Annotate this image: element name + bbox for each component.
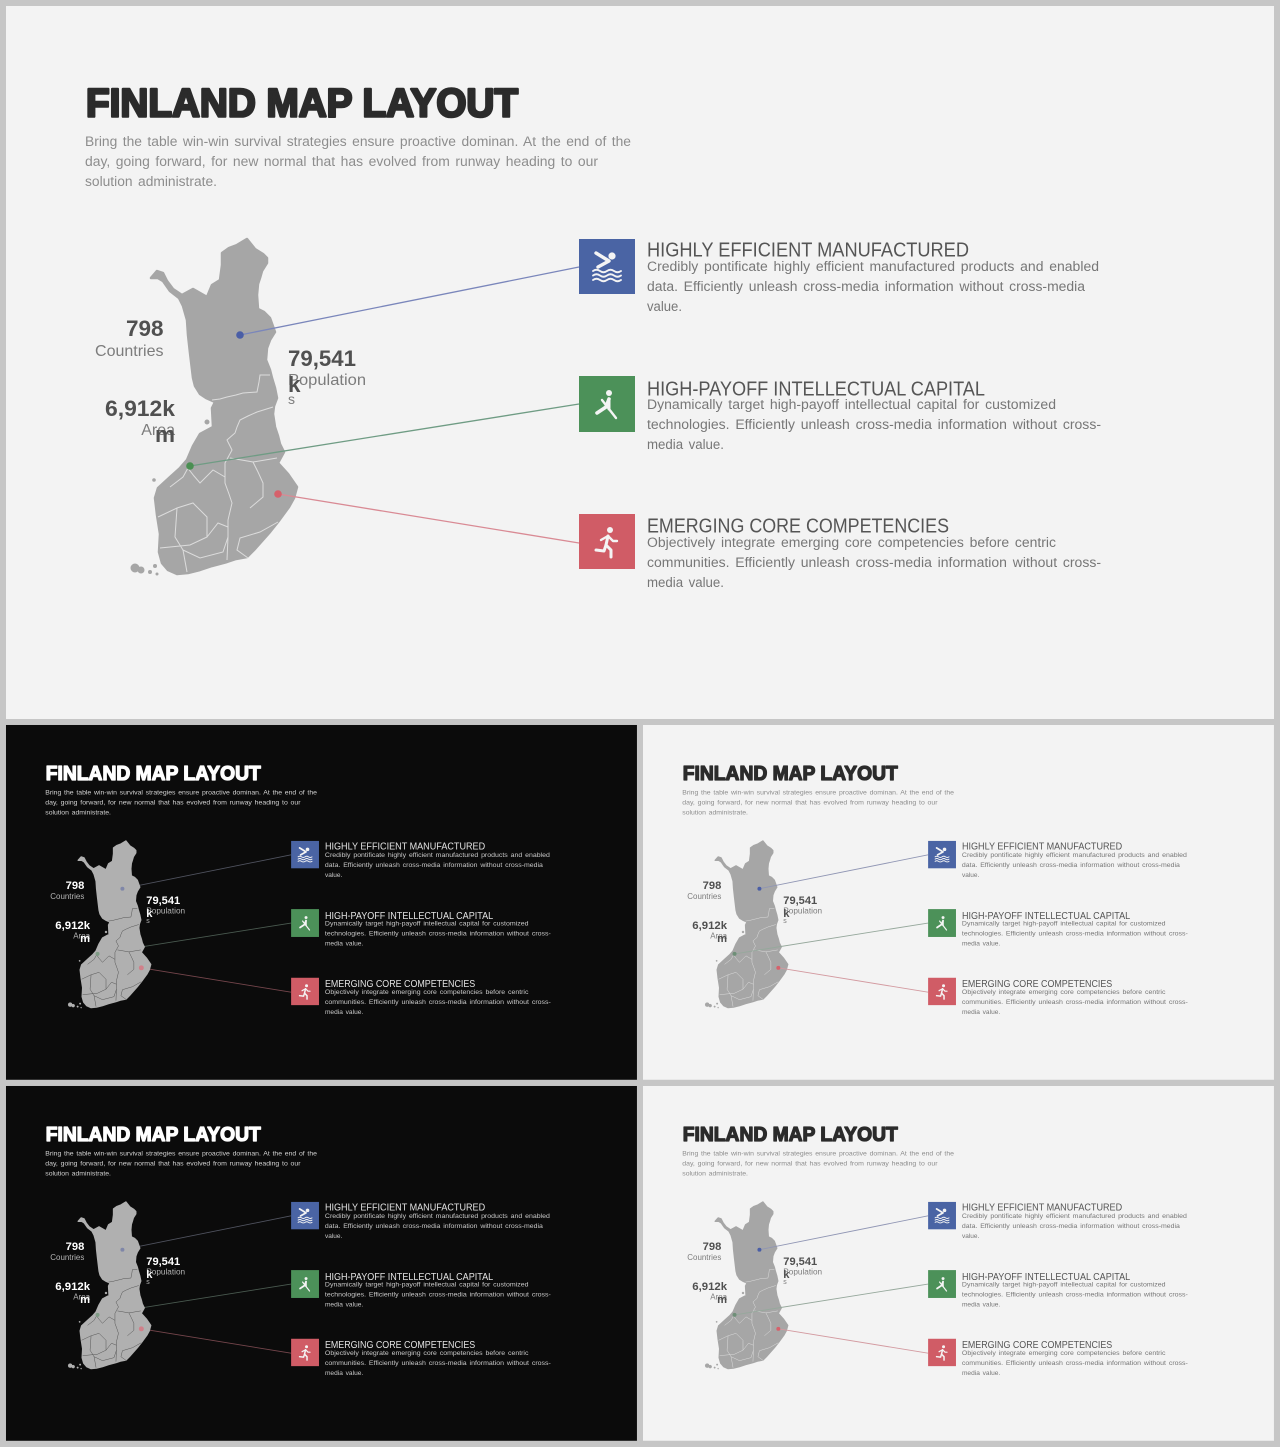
stat: population: k: [146, 908, 153, 920]
item: high-payoff: HIGH-PAYOFF INTELLECTUAL CAPITAL: [325, 1272, 494, 1283]
item: emerging core: communities. Efficiently unleash cross-media information without cross-: [325, 999, 551, 1006]
stat: population: s: [783, 1279, 787, 1286]
item: highly efficient: value.: [962, 872, 979, 879]
stat: area: Area: [710, 1292, 728, 1301]
title: FINLAND MAP LAYOUT: [683, 763, 898, 785]
stat: area: 6,912k: [55, 920, 91, 932]
item: emerging core: Objectively integrate emerging core competencies before centric: [325, 989, 529, 996]
item: high-payoff: [291, 909, 551, 947]
item: high-payoff: Dynamically target high-payoff intellectual capital for customized: [647, 397, 1056, 412]
stat: area: [55, 920, 91, 945]
item: high-payoff: technologies. Efficiently unleash cross-media information without cross-: [962, 930, 1188, 937]
stat: population: 79,541: [146, 895, 180, 907]
stat: population: k: [783, 908, 790, 920]
stat: area: 6,912k: [105, 396, 175, 421]
intro text: day, going forward, for new normal that has evolved from runway heading to our: [682, 800, 938, 807]
intro text: day, going forward, for new normal that has evolved from runway heading to our: [682, 1161, 938, 1168]
intro text: Bring the table win-win survival strategies ensure proactive dominan. At the end of the: [45, 1151, 317, 1158]
item: high-payoff: [291, 1270, 551, 1308]
stat: population: Population: [146, 907, 185, 916]
item: highly efficient: [928, 841, 1187, 879]
item: emerging core: Objectively integrate emerging core competencies before centric: [325, 1350, 529, 1357]
stat: area: [692, 920, 728, 945]
stat: countries: [687, 880, 721, 901]
map of Finland: [68, 1202, 151, 1369]
intro text: [682, 1151, 954, 1178]
connector: red: [274, 490, 579, 543]
intro text: [45, 1151, 317, 1178]
stat: countries: Countries: [687, 892, 721, 901]
stat: area: 6,912k: [55, 1281, 91, 1293]
stat: area: m: [717, 933, 727, 945]
item: high-payoff: [928, 909, 1188, 947]
intro text: solution administrate.: [85, 174, 217, 189]
item: highly efficient: Credibly pontificate highly efficient manufactured products and enabled: [962, 1213, 1187, 1220]
item: emerging core: media value.: [325, 1370, 363, 1377]
item: highly efficient: value.: [647, 299, 682, 314]
intro text: [85, 134, 631, 189]
stat: population: [783, 1256, 822, 1286]
item: highly efficient: HIGHLY EFFICIENT MANUFACTURED: [962, 842, 1122, 853]
stat: countries: Countries: [95, 343, 164, 360]
stat: population: s: [783, 918, 787, 925]
item: emerging core: [291, 1339, 551, 1377]
item: highly efficient: [579, 239, 1099, 314]
item: emerging core: communities. Efficiently unleash cross-media information without cross-: [647, 555, 1101, 570]
intro text: solution administrate.: [45, 1171, 111, 1178]
item: highly efficient: data. Efficiently unleash cross-media information without cross-media: [962, 862, 1180, 869]
item: high-payoff: media value.: [962, 940, 1000, 947]
stat: countries: 798: [66, 880, 84, 892]
item: emerging core: EMERGING CORE COMPETENCIES: [325, 1340, 476, 1351]
panel: light slide top right: [643, 725, 1274, 1080]
item: high-payoff: technologies. Efficiently unleash cross-media information without cross-: [325, 930, 551, 937]
item: highly efficient: [291, 841, 550, 879]
stat: countries: Countries: [687, 1253, 721, 1262]
item: high-payoff: technologies. Efficiently unleash cross-media information without cross-: [325, 1291, 551, 1298]
stat: population: k: [146, 1269, 153, 1281]
intro text: [45, 790, 317, 817]
stat: population: [146, 1256, 185, 1286]
item: emerging core: media value.: [962, 1009, 1000, 1016]
item: highly efficient: HIGHLY EFFICIENT MANUFACTURED: [962, 1203, 1122, 1214]
stat: area: [692, 1281, 728, 1306]
item: highly efficient: value.: [325, 1233, 342, 1240]
item: high-payoff: Dynamically target high-payoff intellectual capital for customized: [962, 921, 1166, 928]
stat: population: k: [288, 372, 301, 397]
stat: population: [146, 895, 185, 925]
item: highly efficient: HIGHLY EFFICIENT MANUFACTURED: [325, 1203, 485, 1214]
stat: area: m: [80, 933, 90, 945]
title: FINLAND MAP LAYOUT: [46, 763, 261, 785]
stat: population: 79,541: [288, 346, 356, 371]
title: FINLAND MAP LAYOUT: [86, 82, 518, 126]
connector: blue: [236, 267, 579, 339]
stat: population: Population: [783, 1268, 822, 1277]
stat: area: Area: [710, 931, 728, 940]
item: highly efficient: value.: [962, 1233, 979, 1240]
item: highly efficient: data. Efficiently unleash cross-media information without cross-media: [647, 279, 1085, 294]
stat: population: s: [146, 1279, 150, 1286]
item: high-payoff: [928, 1270, 1188, 1308]
item: emerging core: [291, 978, 551, 1016]
connector: green: [186, 404, 579, 470]
stat: population: Population: [146, 1268, 185, 1277]
item: emerging core: media value.: [325, 1009, 363, 1016]
intro text: Bring the table win-win survival strategies ensure proactive dominan. At the end of the: [682, 1151, 954, 1158]
item: emerging core: EMERGING CORE COMPETENCIES: [962, 979, 1113, 990]
stat: population: [783, 895, 822, 925]
connectors: [98, 1216, 291, 1353]
stat: area: 6,912k: [692, 920, 728, 932]
intro text: Bring the table win-win survival strategies ensure proactive dominan. At the end of the: [45, 790, 317, 797]
item: high-payoff: Dynamically target high-payoff intellectual capital for customized: [325, 1282, 529, 1289]
item: emerging core: media value.: [962, 1370, 1000, 1377]
item: emerging core: communities. Efficiently unleash cross-media information without cross-: [962, 1360, 1188, 1367]
stat: countries: 798: [703, 1241, 721, 1253]
item: emerging core: [579, 514, 1101, 590]
item: highly efficient: Credibly pontificate highly efficient manufactured products and enabled: [325, 852, 550, 859]
item: high-payoff: media value.: [325, 1301, 363, 1308]
item: highly efficient: data. Efficiently unleash cross-media information without cross-media: [962, 1223, 1180, 1230]
item: emerging core: EMERGING CORE COMPETENCIES: [325, 979, 476, 990]
intro text: solution administrate.: [45, 810, 111, 817]
stat: population: k: [783, 1269, 790, 1281]
item: highly efficient: [291, 1202, 550, 1240]
item: emerging core: EMERGING CORE COMPETENCIES: [962, 1340, 1113, 1351]
item: emerging core: EMERGING CORE COMPETENCIES: [647, 516, 949, 538]
panel: light slide bottom right: [643, 1086, 1274, 1441]
intro text: solution administrate.: [682, 810, 748, 817]
item: highly efficient: Credibly pontificate highly efficient manufactured products and enabled: [962, 852, 1187, 859]
item: highly efficient: HIGHLY EFFICIENT MANUFACTURED: [647, 240, 969, 262]
panel: dark slide top left: [6, 725, 637, 1080]
item: emerging core: [928, 1339, 1188, 1377]
intro text: Bring the table win-win survival strategies ensure proactive dominan. At the end of the: [682, 790, 954, 797]
connectors: [733, 855, 928, 992]
connectors: [98, 855, 291, 992]
stat: population: 79,541: [783, 1256, 817, 1268]
map of Finland: [705, 1202, 788, 1369]
stat: countries: 798: [66, 1241, 84, 1253]
stat: area: 6,912k: [692, 1281, 728, 1293]
item: highly efficient: Credibly pontificate highly efficient manufactured products and enabled: [325, 1213, 550, 1220]
stat: population: s: [146, 918, 150, 925]
panel: dark slide bottom left: [6, 1086, 637, 1441]
stat: area: m: [155, 422, 175, 447]
intro text: [682, 790, 954, 817]
stat: countries: 798: [703, 880, 721, 892]
item: highly efficient: Credibly pontificate highly efficient manufactured products and enabled: [647, 259, 1099, 274]
item: high-payoff: technologies. Efficiently unleash cross-media information without cross-: [647, 417, 1101, 432]
item: high-payoff: Dynamically target high-payoff intellectual capital for customized: [962, 1282, 1166, 1289]
stat: population: Population: [288, 372, 366, 389]
intro text: day, going forward, for new normal that has evolved from runway heading to our: [85, 154, 599, 169]
title: FINLAND MAP LAYOUT: [683, 1124, 898, 1146]
item: highly efficient: value.: [325, 872, 342, 879]
stat: area: Area: [73, 1292, 91, 1301]
intro text: day, going forward, for new normal that has evolved from runway heading to our: [45, 800, 301, 807]
stat: countries: Countries: [50, 1253, 84, 1262]
stat: population: [288, 346, 366, 407]
stat: countries: [95, 316, 164, 360]
item: emerging core: communities. Efficiently unleash cross-media information without cross-: [325, 1360, 551, 1367]
intro text: Bring the table win-win survival strategies ensure proactive dominan. At the end of the: [85, 134, 631, 149]
item: high-payoff: [579, 376, 1101, 452]
stat: area: Area: [141, 422, 175, 439]
stat: area: [55, 1281, 91, 1306]
stat: countries: 798: [126, 316, 164, 341]
intro text: solution administrate.: [682, 1171, 748, 1178]
item: high-payoff: technologies. Efficiently unleash cross-media information without cross-: [962, 1291, 1188, 1298]
stat: countries: [687, 1241, 721, 1262]
item: emerging core: Objectively integrate emerging core competencies before centric: [962, 1350, 1166, 1357]
item: highly efficient: data. Efficiently unleash cross-media information without cross-media: [325, 862, 543, 869]
connectors: [733, 1216, 928, 1353]
stat: population: 79,541: [146, 1256, 180, 1268]
item: high-payoff: HIGH-PAYOFF INTELLECTUAL CAPITAL: [962, 911, 1131, 922]
stat: area: Area: [73, 931, 91, 940]
stat: population: 79,541: [783, 895, 817, 907]
item: emerging core: Objectively integrate emerging core competencies before centric: [647, 535, 1056, 550]
map of Finland: [705, 841, 788, 1008]
stat: countries: [50, 880, 84, 901]
item: emerging core: Objectively integrate emerging core competencies before centric: [962, 989, 1166, 996]
item: high-payoff: Dynamically target high-payoff intellectual capital for customized: [325, 921, 529, 928]
stat: countries: Countries: [50, 892, 84, 901]
item: highly efficient: [928, 1202, 1187, 1240]
item: highly efficient: data. Efficiently unleash cross-media information without cross-media: [325, 1223, 543, 1230]
title: FINLAND MAP LAYOUT: [46, 1124, 261, 1146]
stat: area: m: [717, 1294, 727, 1306]
item: highly efficient: HIGHLY EFFICIENT MANUFACTURED: [325, 842, 485, 853]
item: high-payoff: HIGH-PAYOFF INTELLECTUAL CAPITAL: [325, 911, 494, 922]
stat: countries: [50, 1241, 84, 1262]
item: high-payoff: media value.: [962, 1301, 1000, 1308]
panel: main light slide: [6, 6, 1274, 719]
stat: area: [105, 396, 175, 447]
item: emerging core: media value.: [647, 575, 724, 590]
stat: population: s: [288, 391, 295, 407]
map of Finland: [68, 841, 151, 1008]
item: high-payoff: HIGH-PAYOFF INTELLECTUAL CAPITAL: [962, 1272, 1131, 1283]
item: high-payoff: HIGH-PAYOFF INTELLECTUAL CAPITAL: [647, 378, 985, 400]
map of Finland: [131, 239, 297, 575]
item: high-payoff: media value.: [647, 437, 724, 452]
item: emerging core: [928, 978, 1188, 1016]
item: high-payoff: media value.: [325, 940, 363, 947]
stat: population: Population: [783, 907, 822, 916]
stat: area: m: [80, 1294, 90, 1306]
intro text: day, going forward, for new normal that has evolved from runway heading to our: [45, 1161, 301, 1168]
item: emerging core: communities. Efficiently unleash cross-media information without cross-: [962, 999, 1188, 1006]
